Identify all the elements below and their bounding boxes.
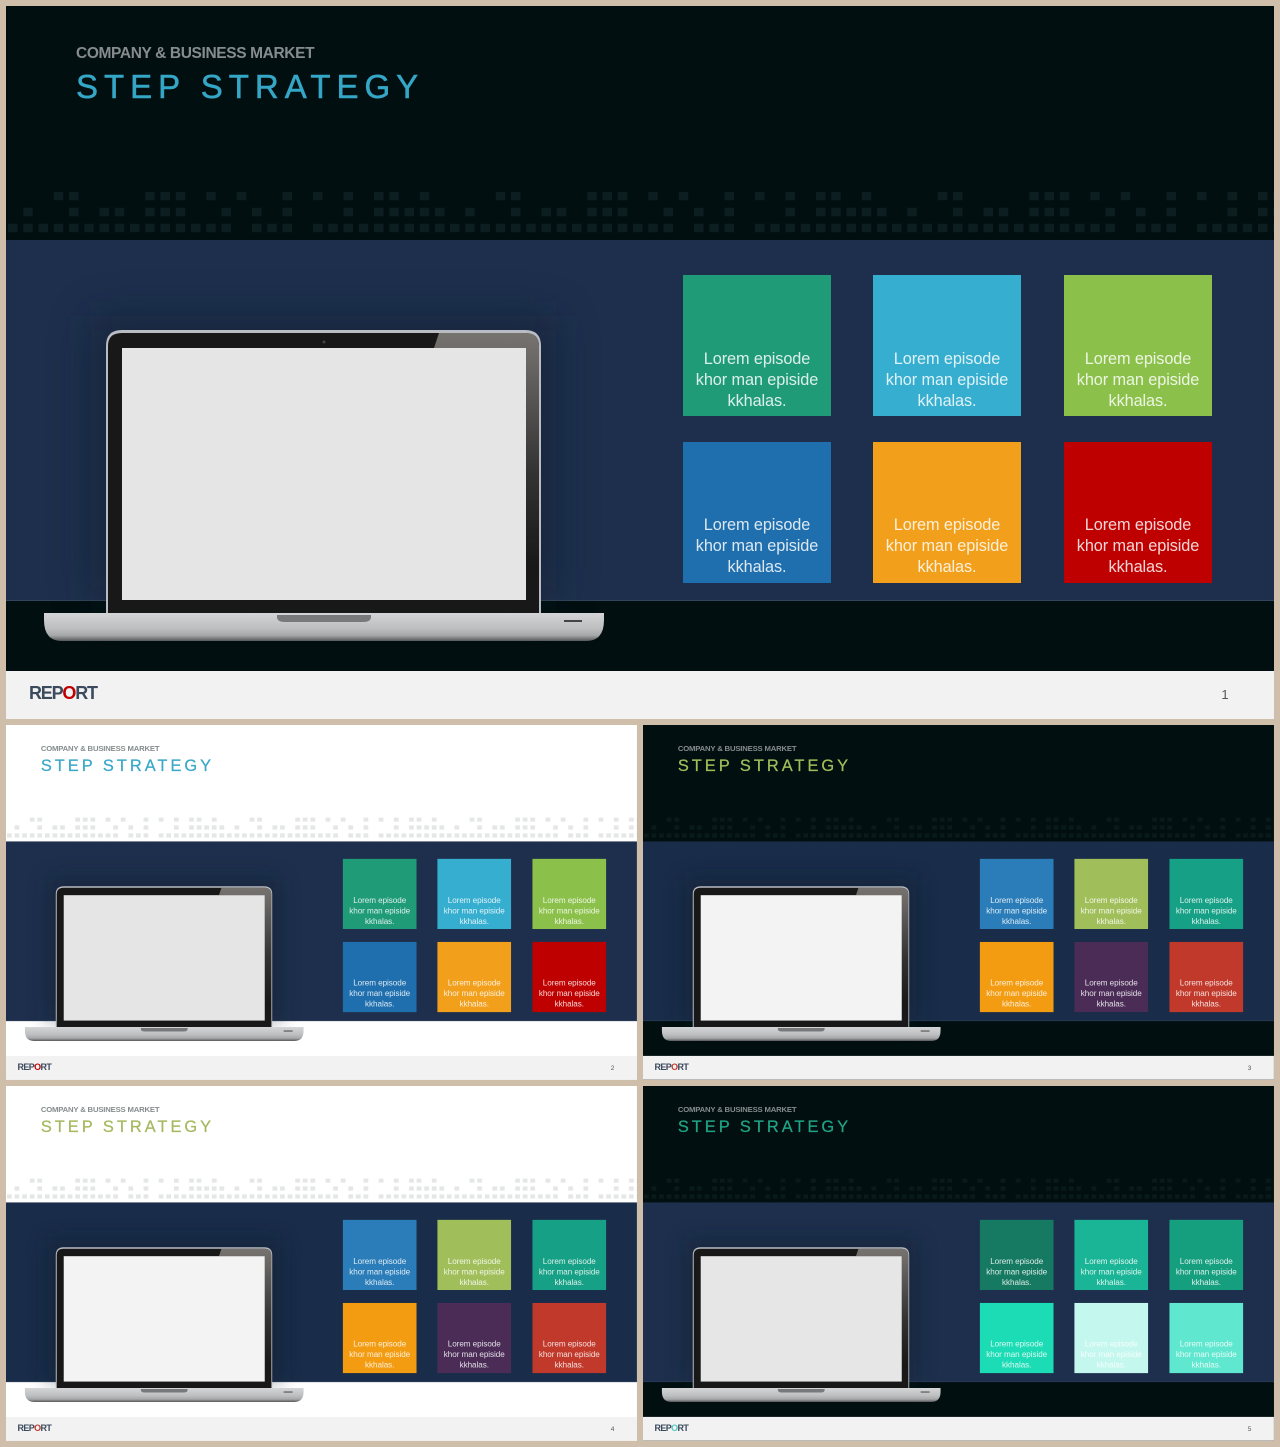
tile: orange: [980, 942, 1054, 1012]
dot pattern strip: [644, 818, 1270, 838]
tile: teal: Lorem episode: [543, 1257, 596, 1266]
tile: teal: [1169, 1220, 1243, 1290]
tile: red: [532, 942, 606, 1012]
tile: pale mint: Lorem episode: [1085, 1340, 1138, 1349]
tile: cyan: kkhalas.: [918, 392, 976, 410]
tile: teal: [532, 1220, 606, 1290]
footer bar: [6, 1417, 637, 1441]
title: STEP STRATEGY: [41, 756, 214, 774]
tile: blue: kkhalas.: [365, 1000, 394, 1009]
tile: pale mint: [1074, 1303, 1148, 1373]
tile: green: [683, 275, 831, 416]
tile: red: Lorem episode: [543, 1340, 596, 1349]
tile: purple: Lorem episode: [1085, 979, 1138, 988]
tile: blue: Lorem episode: [353, 1257, 406, 1266]
tile: red: [532, 1303, 606, 1373]
tile: bright teal: [980, 1303, 1054, 1373]
tile: green: kkhalas.: [365, 917, 394, 926]
tile: turquoise: kkhalas.: [1097, 1278, 1126, 1287]
tile: bright teal: kkhalas.: [1002, 1361, 1031, 1370]
tile: light teal: khor man episide: [1176, 1350, 1237, 1359]
tile: green: Lorem episode: [704, 350, 810, 368]
footer bar: [643, 1417, 1274, 1441]
tile: cyan: [873, 275, 1021, 416]
tile: lime: Lorem episode: [1085, 350, 1191, 368]
tile: orange: [343, 1303, 417, 1373]
tile: blue: khor man episide: [986, 907, 1047, 916]
tile: orange: Lorem episode: [990, 979, 1043, 988]
tile: blue: [343, 942, 417, 1012]
tile: teal: Lorem episode: [1180, 1257, 1233, 1266]
tile: orange: [437, 942, 511, 1012]
tile: dark teal: kkhalas.: [1002, 1278, 1031, 1287]
tile: orange: khor man episide: [444, 989, 505, 998]
tile: green: [343, 859, 417, 929]
tile: red: [1064, 442, 1212, 583]
tile: purple: Lorem episode: [448, 1340, 501, 1349]
footer bar: 4: [611, 1425, 614, 1432]
tile: blue: [980, 859, 1054, 929]
footer bar: 3: [1248, 1064, 1251, 1071]
tile: light teal: kkhalas.: [1192, 1361, 1221, 1370]
laptop illustration: [24, 1242, 304, 1402]
tile: pale mint: khor man episide: [1081, 1350, 1142, 1359]
tile: olive green: [1074, 859, 1148, 929]
tile: bright teal: khor man episide: [986, 1350, 1047, 1359]
tile: blue: khor man episide: [349, 1268, 410, 1277]
dot pattern strip: [7, 818, 637, 838]
footer bar: REPORT: [17, 1062, 51, 1072]
tile: teal: khor man episide: [539, 1268, 600, 1277]
tile: blue: Lorem episode: [990, 896, 1043, 905]
tile: blue: kkhalas.: [1002, 917, 1031, 926]
tile: orange: kkhalas.: [1002, 1000, 1031, 1009]
footer bar: REPORT: [654, 1423, 688, 1433]
tile: blue: kkhalas.: [365, 1278, 394, 1287]
tile: bright teal: Lorem episode: [990, 1340, 1043, 1349]
tile: green: khor man episide: [696, 371, 818, 389]
slide 3: dark slide, flat palette tiles: [643, 725, 1274, 1080]
slide 2: white slide, multicolour tiles: [6, 725, 637, 1080]
tile: lime: [532, 859, 606, 929]
tile: blue: kkhalas.: [728, 558, 786, 576]
tile: purple: kkhalas.: [460, 1361, 489, 1370]
tile: green: Lorem episode: [353, 896, 406, 905]
tile: orange: Lorem episode: [353, 1340, 406, 1349]
navy band: [6, 1202, 637, 1382]
tile: orange: kkhalas.: [365, 1361, 394, 1370]
tile: teal: khor man episide: [1176, 907, 1237, 916]
tile: green: khor man episide: [349, 907, 410, 916]
tile: cyan: kkhalas.: [460, 917, 489, 926]
tile: blue: [343, 1220, 417, 1290]
tile: red: khor man episide: [1176, 989, 1237, 998]
dot pattern strip: [7, 1178, 637, 1198]
tile: olive green: khor man episide: [444, 1268, 505, 1277]
footer bar: [6, 671, 1274, 719]
footer bar: REPORT: [654, 1062, 688, 1072]
tile: turquoise: khor man episide: [1081, 1268, 1142, 1277]
tile: teal: kkhalas.: [1192, 917, 1221, 926]
tile: orange: khor man episide: [349, 1350, 410, 1359]
footer bar: [643, 1056, 1274, 1080]
footer bar: [6, 1056, 637, 1080]
tile: orange: kkhalas.: [918, 558, 976, 576]
footer bar: REPORT: [29, 683, 97, 703]
tile: olive green: [437, 1220, 511, 1290]
tile: teal: khor man episide: [1176, 1268, 1237, 1277]
subtitle: COMPANY & BUSINESS MARKET: [41, 1105, 159, 1114]
footer bar: 5: [1248, 1425, 1251, 1432]
tile: purple: khor man episide: [1081, 989, 1142, 998]
tile: turquoise: Lorem episode: [1085, 1257, 1138, 1266]
tile: purple: khor man episide: [444, 1350, 505, 1359]
tile: red: kkhalas.: [1192, 1000, 1221, 1009]
slide 4: white slide, flat palette tiles: [6, 1086, 637, 1441]
tile: light teal: [1169, 1303, 1243, 1373]
tile: red: kkhalas.: [1109, 558, 1167, 576]
tile: dark teal: [980, 1220, 1054, 1290]
tile: cyan: khor man episide: [444, 907, 505, 916]
tile: teal: kkhalas.: [555, 1278, 584, 1287]
title: STEP STRATEGY: [41, 1117, 214, 1135]
navy band: [643, 841, 1274, 1021]
tile: orange: kkhalas.: [460, 1000, 489, 1009]
tile: lime: khor man episide: [1077, 371, 1199, 389]
tile: lime: [1064, 275, 1212, 416]
tile: cyan: [437, 859, 511, 929]
tile: dark teal: khor man episide: [986, 1268, 1047, 1277]
tile: red: Lorem episode: [1085, 516, 1191, 534]
tile: olive green: khor man episide: [1081, 907, 1142, 916]
tile: teal: kkhalas.: [1192, 1278, 1221, 1287]
tile: orange: khor man episide: [986, 989, 1047, 998]
tile: turquoise: [1074, 1220, 1148, 1290]
tile: olive green: kkhalas.: [1097, 917, 1126, 926]
tile: red: kkhalas.: [555, 1361, 584, 1370]
tile: red: Lorem episode: [1180, 979, 1233, 988]
tile: cyan: Lorem episode: [448, 896, 501, 905]
subtitle: COMPANY & BUSINESS MARKET: [76, 45, 314, 62]
title: STEP STRATEGY: [76, 68, 424, 105]
dot pattern strip: [8, 192, 1274, 232]
tile: light teal: Lorem episode: [1180, 1340, 1233, 1349]
tile: pale mint: kkhalas.: [1097, 1361, 1126, 1370]
tile: orange: Lorem episode: [448, 979, 501, 988]
tile: teal: Lorem episode: [1180, 896, 1233, 905]
tile: blue: khor man episide: [696, 537, 818, 555]
tile: lime: kkhalas.: [1109, 392, 1167, 410]
tile: lime: kkhalas.: [555, 917, 584, 926]
tile: blue: Lorem episode: [704, 516, 810, 534]
tile: red: khor man episide: [539, 989, 600, 998]
subtitle: COMPANY & BUSINESS MARKET: [678, 1105, 796, 1114]
footer bar: 1: [1221, 687, 1229, 702]
tile: olive green: kkhalas.: [460, 1278, 489, 1287]
tile: green: kkhalas.: [728, 392, 786, 410]
tile: dark teal: Lorem episode: [990, 1257, 1043, 1266]
dot pattern strip: [644, 1178, 1270, 1198]
tile: teal: [1169, 859, 1243, 929]
footer bar: 2: [611, 1064, 614, 1071]
tile: red: Lorem episode: [543, 979, 596, 988]
tile: orange: khor man episide: [886, 537, 1008, 555]
tile: blue: Lorem episode: [353, 979, 406, 988]
tile: red: [1169, 942, 1243, 1012]
tile: blue: [683, 442, 831, 583]
tile: purple: kkhalas.: [1097, 1000, 1126, 1009]
tile: red: kkhalas.: [555, 1000, 584, 1009]
slide 1: large dark slide: [6, 6, 1274, 719]
laptop illustration: [662, 880, 941, 1041]
tile: red: khor man episide: [1077, 537, 1199, 555]
tile: red: khor man episide: [539, 1350, 600, 1359]
laptop illustration: [24, 878, 304, 1041]
tile: blue: khor man episide: [349, 989, 410, 998]
laptop illustration: [44, 315, 604, 641]
tile: lime: khor man episide: [539, 907, 600, 916]
navy band: [6, 240, 1274, 601]
tile: cyan: khor man episide: [886, 371, 1008, 389]
navy band: [643, 1202, 1274, 1382]
tile: olive green: Lorem episode: [448, 1257, 501, 1266]
tile: orange: Lorem episode: [894, 516, 1000, 534]
tile: purple: [1074, 942, 1148, 1012]
tile: lime: Lorem episode: [543, 896, 596, 905]
laptop illustration: [662, 1240, 941, 1402]
tile: purple: [437, 1303, 511, 1373]
title: STEP STRATEGY: [678, 1117, 851, 1135]
slide 5: dark slide, teal tiles: [643, 1086, 1274, 1441]
footer bar: REPORT: [17, 1423, 51, 1433]
navy band: [6, 841, 637, 1021]
subtitle: COMPANY & BUSINESS MARKET: [678, 744, 796, 753]
title: STEP STRATEGY: [678, 756, 851, 774]
tile: cyan: Lorem episode: [894, 350, 1000, 368]
tile: orange: [873, 442, 1021, 583]
tile: olive green: Lorem episode: [1085, 896, 1138, 905]
subtitle: COMPANY & BUSINESS MARKET: [41, 744, 159, 753]
